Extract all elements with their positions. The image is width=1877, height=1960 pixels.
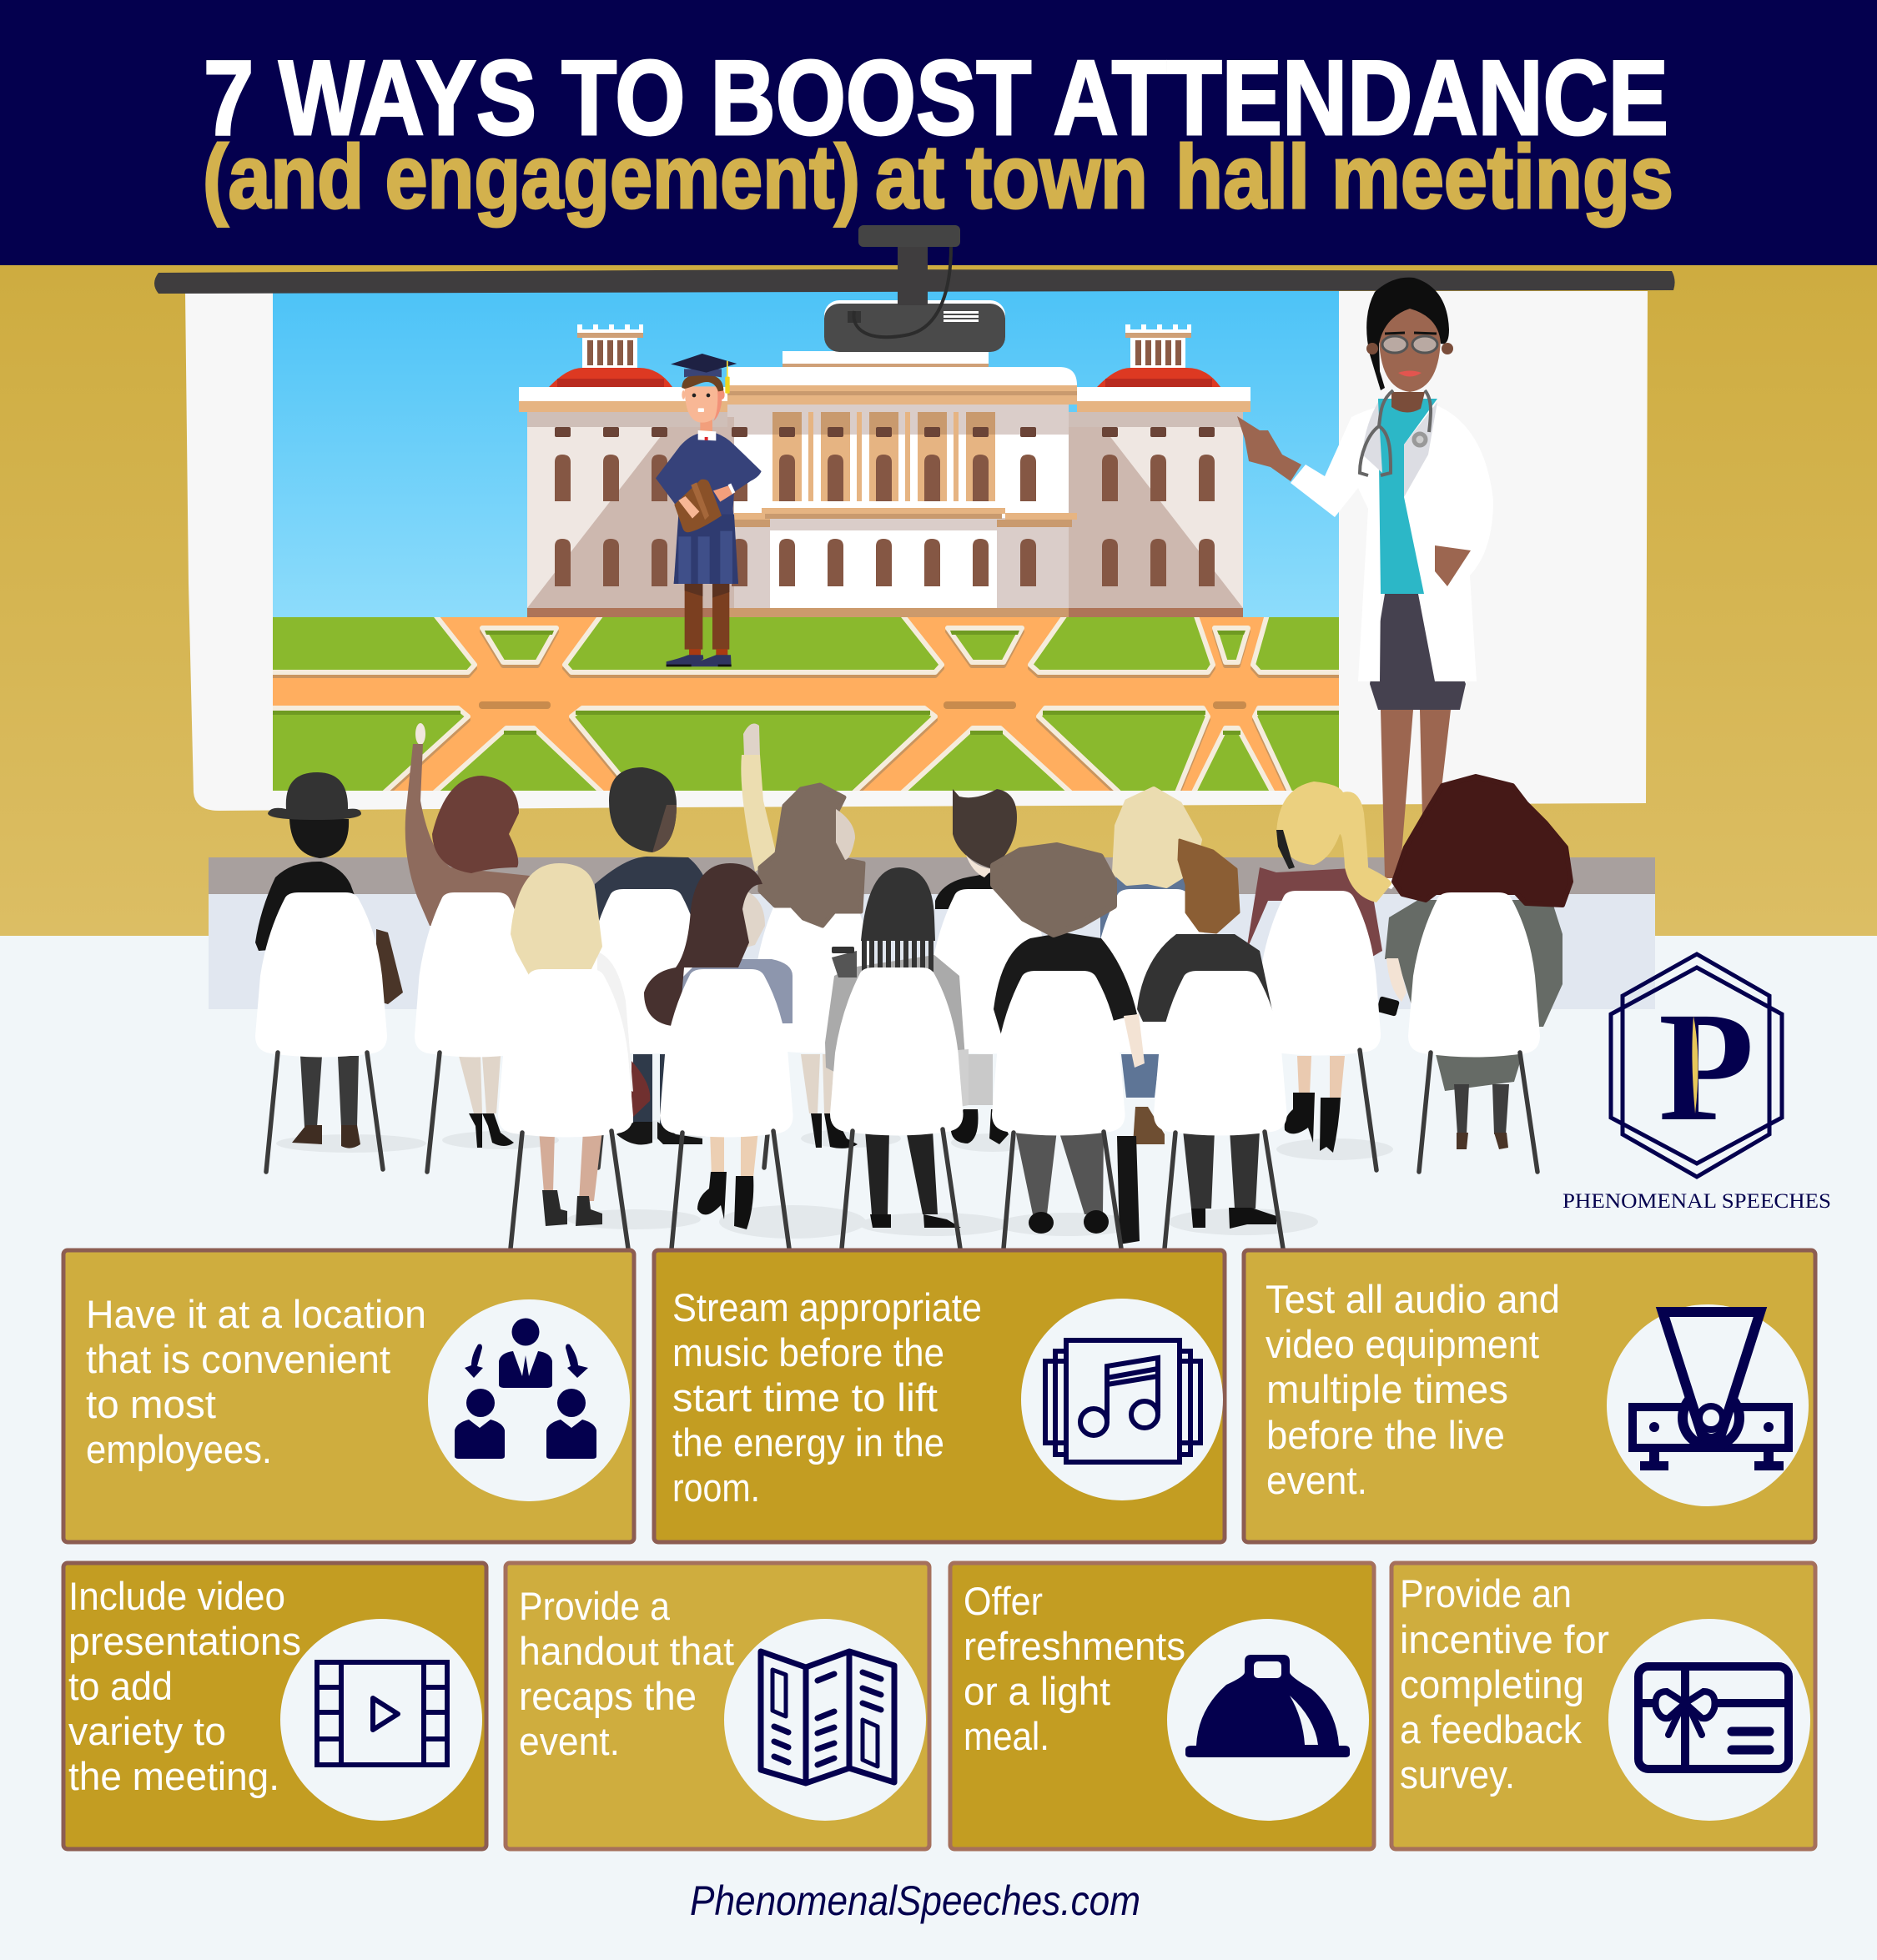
footer website: PhenomenalSpeeches.com <box>690 1877 1140 1924</box>
card 5: handout: Provide a <box>519 1584 671 1628</box>
card 4: video: to add <box>68 1664 173 1708</box>
card 4: video: Include video <box>68 1574 285 1618</box>
audience member 6: wavy hair <box>760 785 863 926</box>
card 7: incentive: completing <box>1400 1662 1584 1706</box>
projected image: campus ground <box>273 617 1339 791</box>
logo: Phenomenal Speeches: PHENOMENAL SPEECHES <box>1562 1190 1831 1213</box>
card 2: music: Stream appropriate <box>672 1285 982 1329</box>
card 1: location <box>63 1250 634 1542</box>
projection screen <box>185 291 1648 811</box>
card 5: handout: recaps the <box>519 1674 697 1718</box>
shadows on floor <box>276 1120 1393 1239</box>
audience member 8: dark hair <box>935 789 1017 1144</box>
card 7: incentive: incentive for <box>1400 1617 1609 1661</box>
projected image: sky <box>273 291 1339 618</box>
card 6: refreshments: Offer <box>964 1579 1043 1623</box>
subtitle: (and engagement) <box>203 126 860 227</box>
card 2: music <box>654 1250 1225 1542</box>
audience member 2: raised hand <box>405 723 530 1148</box>
card 3: equipment: before the live <box>1266 1413 1505 1457</box>
card 4: video: variety to <box>68 1709 226 1753</box>
card 4: video <box>63 1563 486 1849</box>
projector mount <box>854 225 960 337</box>
card 3: equipment: multiple times <box>1266 1367 1508 1411</box>
audience member 4: blonde front <box>511 863 633 1226</box>
card 7: incentive: survey. <box>1400 1752 1515 1797</box>
card 6: refreshments <box>950 1563 1374 1849</box>
title: 7 WAYS TO BOOST ATTENDANCE <box>204 38 1668 157</box>
front row chair legs <box>511 1129 1283 1249</box>
subtitle: at town <box>875 126 1148 227</box>
icon: film strip with play <box>317 1662 447 1765</box>
card 2: music: the energy in the <box>672 1420 944 1465</box>
stage <box>209 857 1655 1009</box>
audience member 13: long dark red hair <box>1376 776 1571 1149</box>
logo: Phenomenal Speeches <box>1562 954 1831 1213</box>
icon: food cloche <box>1185 1655 1350 1757</box>
card 3: equipment: event. <box>1266 1458 1367 1502</box>
icon: three people with arrows <box>455 1318 596 1459</box>
graduate figure <box>656 354 762 666</box>
audience member 10: blonde, blue dress <box>1100 789 1200 1144</box>
icon: music album <box>1045 1340 1200 1462</box>
projector rail <box>154 269 1675 294</box>
card 3: equipment <box>1244 1250 1815 1542</box>
audience member 9: curly hair <box>994 846 1145 1244</box>
card 6: refreshments: or a light <box>964 1669 1110 1713</box>
card 1: location: that is convenient <box>86 1337 390 1381</box>
card 5: handout: handout that <box>519 1629 734 1673</box>
card 2: music: start time to lift <box>672 1375 938 1420</box>
card 2: music: room. <box>672 1465 760 1510</box>
card 3: equipment: video equipment <box>1266 1322 1539 1366</box>
card 1: location: to most <box>86 1382 216 1426</box>
card 7: incentive <box>1391 1563 1815 1849</box>
card 7: incentive: a feedback <box>1400 1707 1582 1751</box>
audience member 11: brown ponytail <box>1137 840 1276 1229</box>
back row chair legs <box>266 1050 1537 1172</box>
projected image: capitol building <box>519 324 1250 617</box>
audience member 6: raised hand <box>741 724 858 1148</box>
back row chairs <box>255 888 1540 1058</box>
title banner <box>0 0 1877 265</box>
doctor presenter <box>1237 278 1493 889</box>
subtitle: hall meetings <box>1175 126 1673 227</box>
icon: folded brochure <box>761 1651 894 1783</box>
gold back wall <box>0 265 1877 936</box>
audience member 3: navy top <box>595 767 707 1144</box>
card 6: refreshments: refreshments <box>964 1624 1185 1668</box>
card 5: handout <box>506 1563 929 1849</box>
icon: projector <box>1633 1312 1789 1470</box>
card 7: incentive: Provide an <box>1400 1571 1572 1616</box>
audience member 1: hat <box>255 772 403 1148</box>
logo: Phenomenal Speeches: P <box>1658 979 1754 1153</box>
card 3: equipment: Test all audio and <box>1266 1277 1560 1321</box>
subtitle <box>203 126 1673 227</box>
card 2: music: music before the <box>672 1330 944 1375</box>
audience member 12: blonde ponytail, maroon top <box>1246 781 1391 1153</box>
card 1: location: Have it at a location <box>86 1292 426 1336</box>
front row chairs <box>498 967 1287 1137</box>
audience member 5: long dark hair <box>644 863 793 1229</box>
icon: gift card <box>1638 1666 1789 1769</box>
audience member 7: braids, coffee cup <box>825 867 969 1228</box>
projector <box>824 300 1005 352</box>
card 1: location: employees. <box>86 1427 272 1471</box>
card 4: video: the meeting. <box>68 1754 279 1798</box>
card 6: refreshments: meal. <box>964 1714 1049 1758</box>
card 4: video: presentations <box>68 1619 301 1663</box>
card 5: handout: event. <box>519 1719 620 1763</box>
